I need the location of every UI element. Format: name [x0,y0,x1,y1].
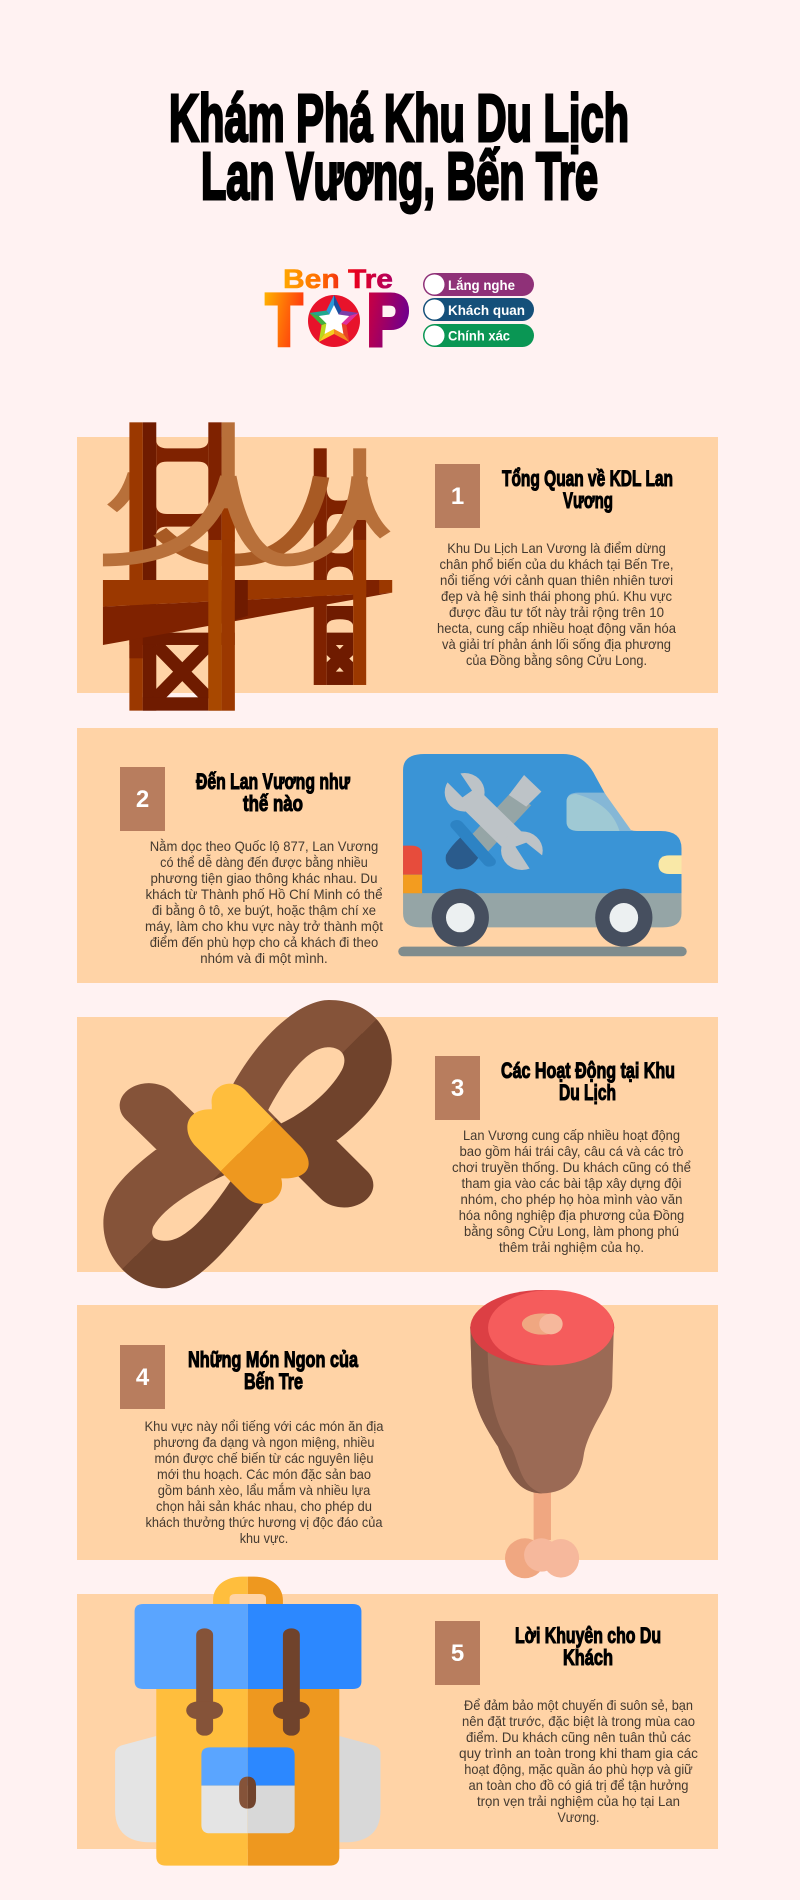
text block 1 [437,540,676,668]
title [169,81,629,214]
text block 4: mới thu hoạch. Các món đặc sản bao [157,1466,371,1482]
text block 3: bao gồm hái trái cây, câu cá và các trò [460,1143,684,1159]
text block 2: khách từ Thành phố Hồ Chí Minh có thể [146,886,383,902]
number box 4 [120,1345,165,1409]
icon: repair van [398,754,687,956]
logo: Ben Tre TOP: T [266,281,302,361]
logo: Ben Tre TOP: Ben Tre [283,264,393,294]
text block 5: điểm. Du khách cũng nên tuân thủ các [466,1729,691,1745]
number box 2 [120,767,165,831]
text block 4 [144,1418,384,1546]
heading 4: Bến Tre [244,1369,303,1394]
text block 5: hoạt động, mặc quần áo phù hợp và giữ [464,1761,693,1777]
text block 4: món được chế biến từ các nguyên liệu [154,1450,374,1466]
text block 4: phương đa dạng và ngon miệng, nhiều [154,1434,374,1450]
text block 4: Khu vực này nổi tiếng với các món ăn địa [144,1418,384,1434]
icon: suspension bridge [103,422,392,711]
panel 3 background [77,1017,718,1272]
number box 3: 3 [451,1075,464,1102]
logo: Ben Tre TOP: P [367,281,409,361]
badge: Chính xác: Chính xác [448,328,510,344]
text block 2: máy, làm cho khu vực này trở thành một [145,918,383,934]
panel 1 background [77,437,718,693]
number box 3 [435,1056,480,1120]
panel 4 background [77,1305,718,1560]
text block 1: nổi tiếng với cảnh quan thiên nhiên tươi [440,572,673,588]
text block 3: tham gia vào các bài tập xây dựng đội [462,1175,682,1191]
text block 5: Để đảm bảo một chuyến đi suôn sẻ, bạn [464,1697,693,1713]
text block 1: được đầu tư tốt này trải rộng trên 10 [449,604,664,620]
heading 5: Lời Khuyên cho Du [515,1623,661,1648]
icon: drumstick [470,1290,614,1578]
text block 2 [145,838,383,966]
heading 3: Các Hoạt Động tại Khu [501,1058,675,1083]
heading 5 [515,1623,661,1670]
number box 2: 2 [136,786,149,813]
number box 4: 4 [136,1364,150,1391]
badge: Chính xác [423,324,534,347]
heading 1: Tổng Quan về KDL Lan [502,466,673,491]
heading 1: Vương [563,488,613,513]
heading 1 [502,466,673,513]
text block 1: chân phổ biến của du khách tại Bến Tre, [440,556,674,572]
panel 2 background [77,728,718,983]
heading 4: Những Món Ngon của [188,1347,359,1372]
text block 5: Vương. [558,1809,600,1825]
text block 1: và giải trí phản ánh lối sống địa phương [442,636,671,652]
text block 2: có thể dễ dàng đến được bằng nhiều [160,854,368,870]
text block 1: Khu Du Lịch Lan Vương là điểm dừng [447,540,666,556]
badge: Lắng nghe: Lắng nghe [448,276,515,293]
logo: Ben Tre TOP [266,264,409,361]
icon: knot [103,1000,392,1288]
heading 3 [501,1058,675,1105]
text block 4: khách thưởng thức hương vị độc đáo của [146,1514,383,1530]
badge: Khách quan: Khách quan [448,302,525,318]
text block 1: đẹp và hệ sinh thái phong phú. Khu vực [441,588,672,604]
text block 5: trọn vẹn trải nghiệm của họ tại Lan [477,1793,680,1809]
text block 3: bằng sông Cửu Long, làm phong phú [464,1223,679,1239]
number box 1: 1 [451,483,464,510]
text block 1: của Đồng bằng sông Cửu Long. [466,652,647,668]
text block 5: an toàn cho đồ có giá trị để tận hưởng [468,1777,688,1793]
text block 3: nhóm, cho phép họ hòa mình vào văn [460,1191,682,1207]
heading 2 [196,769,350,816]
text block 3: Lan Vương cung cấp nhiều hoạt động [463,1127,680,1143]
text block 5 [459,1697,698,1825]
text block 5: nên đặt trước, đặc biệt là trong mùa cao [462,1713,695,1729]
number box 5: 5 [451,1640,464,1667]
badge: Khách quan [423,298,534,321]
text block 2: điểm đến phù hợp cho cả khách đi theo [150,934,378,950]
panel 5 background [77,1594,718,1849]
heading 2: thế nào [243,791,303,816]
number box 5 [435,1621,480,1685]
text block 4: gồm bánh xèo, lẩu mắm và nhiều lựa [158,1482,370,1498]
icon: backpack [115,1577,381,1866]
text block 2: phương tiện giao thông khác nhau. Du [150,870,378,886]
badge: Lắng nghe [423,273,534,296]
text block 5: quy trình an toàn trong khi tham gia các [459,1745,698,1761]
text block 3: thêm trải nghiệm của họ. [499,1239,644,1255]
number box 1 [435,464,480,528]
text block 3 [452,1127,691,1255]
text block 4: chọn hải sản khác nhau, cho phép du [156,1498,372,1514]
text block 2: nhóm và đi một mình. [200,950,328,966]
text block 1: hecta, cung cấp nhiều hoạt động văn hóa [437,620,676,636]
heading 5: Khách [563,1645,613,1670]
text block 4: khu vực. [240,1530,288,1546]
text block 3: chơi truyền thống. Du khách cũng có thể [452,1159,691,1175]
text block 3: hóa nông nghiệp địa phương của Đồng [459,1207,684,1223]
heading 2: Đến Lan Vương như [196,769,350,794]
heading 4 [188,1347,359,1394]
text block 2: đi bằng ô tô, xe buýt, hoặc thậm chí xe [152,902,376,918]
heading 3: Du Lịch [559,1080,616,1105]
text block 2: Nằm dọc theo Quốc lộ 877, Lan Vương [150,838,378,854]
